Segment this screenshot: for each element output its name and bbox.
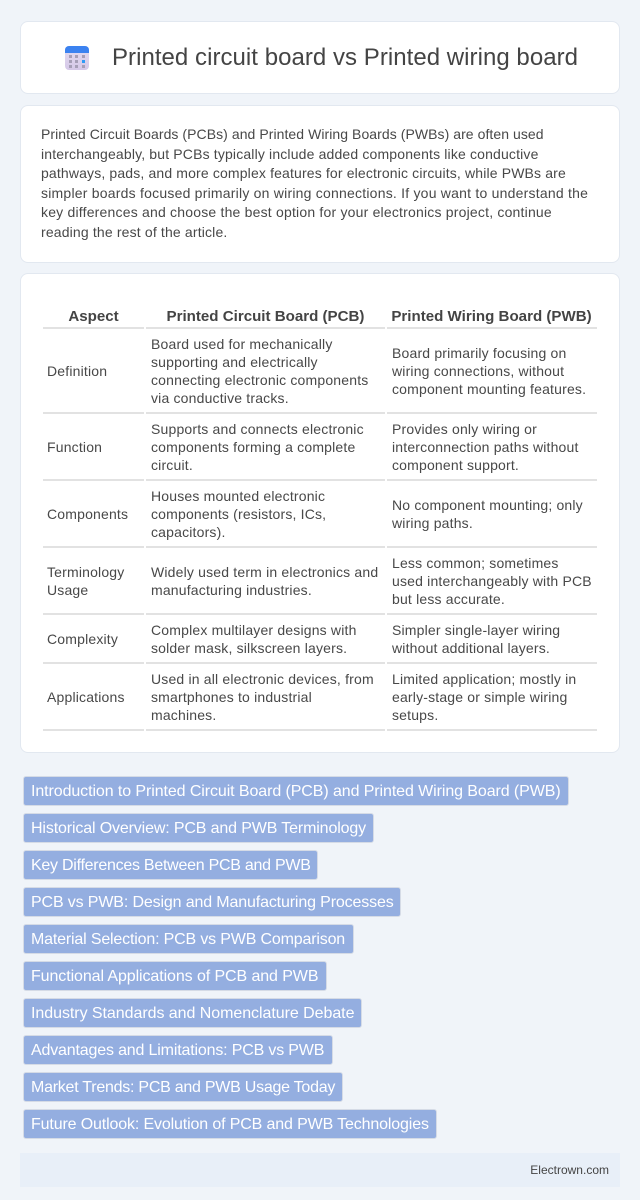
icon: circuit board chip <box>65 46 89 70</box>
table row: Definition: connecting electronic components <box>151 372 368 388</box>
tag: future outlook <box>23 1109 437 1139</box>
tag: advantages and limitations <box>23 1035 333 1065</box>
text block: introduction paragraph: simpler boards focused primarily on wiring connections. If you want to understand the <box>41 184 588 200</box>
table row: Definition: supporting and electrically <box>151 354 318 370</box>
tag: key differences <box>23 850 318 880</box>
table row: Function: Function <box>47 439 102 455</box>
table row: Complexity: solder mask, silkscreen layers. <box>151 640 347 656</box>
tag: historical overview: Historical Overview: PCB and PWB Terminology <box>31 820 366 837</box>
text block: introduction paragraph <box>41 126 588 240</box>
table row: Components <box>43 488 597 548</box>
table row: Definition <box>43 336 597 414</box>
tag: market trends <box>23 1072 343 1102</box>
panel: introduction <box>20 105 620 263</box>
table row: Terminology Usage: but less accurate. <box>392 591 505 607</box>
tag: introduction <box>23 776 569 806</box>
tag: material selection: Material Selection: PCB vs PWB Comparison <box>31 931 345 948</box>
tag: key differences: Key Differences Between PCB and PWB <box>31 857 311 874</box>
tag: industry standards <box>23 998 362 1028</box>
table row: Components: Houses mounted electronic <box>151 488 325 504</box>
table row: Applications: Applications <box>47 689 125 705</box>
footer <box>20 1153 620 1187</box>
table row: Applications: machines. <box>151 707 216 723</box>
text block: introduction paragraph: pathways, pads, and more complex features for electronic circuits, while PWBs are <box>41 165 566 181</box>
table row: Applications: Used in all electronic devices, from <box>151 671 374 687</box>
table row: Function: component support. <box>392 457 519 473</box>
table row: Components: capacitors). <box>151 524 226 540</box>
tag: advantages and limitations: Advantages and Limitations: PCB vs PWB <box>31 1042 324 1059</box>
table header: Aspect <box>68 308 119 325</box>
table row: Components: components (resistors, ICs, <box>151 506 326 522</box>
table row: Terminology Usage: Widely used term in electronics and <box>151 564 378 580</box>
table row: Terminology Usage: manufacturing industries. <box>151 582 312 598</box>
table row: Applications <box>43 671 597 731</box>
table row: Function: circuit. <box>151 457 193 473</box>
tag: functional applications <box>23 961 327 991</box>
table row: Complexity <box>43 622 597 664</box>
tag: design and manufacturing: PCB vs PWB: Design and Manufacturing Processes <box>31 894 394 911</box>
table row: Terminology Usage: Usage <box>47 582 88 598</box>
panel: header <box>20 21 620 94</box>
table row: Terminology Usage: Terminology <box>47 564 124 580</box>
table row: Definition: Board used for mechanically <box>151 336 333 352</box>
table row: Terminology Usage: Less common; sometimes <box>392 555 559 571</box>
table row: Components: wiring paths. <box>392 515 473 531</box>
table row: Definition: wiring connections, without <box>392 363 564 379</box>
table header <box>43 308 597 329</box>
table row: Function: components forming a complete <box>151 439 355 455</box>
table row: Function: interconnection paths without <box>392 439 579 455</box>
text block: introduction paragraph: Printed Circuit Boards (PCBs) and Printed Wiring Boards (PWBs) are often used <box>41 126 544 142</box>
table row: Complexity: without additional layers. <box>392 640 550 656</box>
table row: Components: Components <box>47 506 128 522</box>
footer credit: Electrown.com <box>530 1163 609 1177</box>
tag: industry standards: Industry Standards and Nomenclature Debate <box>31 1005 354 1022</box>
table row: Function: Supports and connects electronic <box>151 421 364 437</box>
table row: Definition: Board primarily focusing on <box>392 345 566 361</box>
table row: Definition: via conductive tracks. <box>151 390 289 406</box>
panel: comparison table <box>20 273 620 753</box>
text block: introduction paragraph: key differences and choose the best option for your electronics project, continue <box>41 204 552 220</box>
table row: Definition: Definition <box>47 363 107 379</box>
table header: Printed Wiring Board (PWB) <box>391 308 592 325</box>
table row: Applications: early-stage or simple wiring <box>392 689 567 705</box>
tag: future outlook: Future Outlook: Evolution of PCB and PWB Technologies <box>31 1116 429 1133</box>
table row: Applications: smartphones to industrial <box>151 689 312 705</box>
table row: Terminology Usage <box>43 555 597 615</box>
table header: Printed Circuit Board (PCB) <box>167 308 364 325</box>
table row: Terminology Usage: used interchangeably with PCB <box>392 573 592 589</box>
list of article section tags <box>23 776 569 1139</box>
table row: Function <box>43 421 597 481</box>
text block: introduction paragraph: interchangeably, but PCBs typically include added components like conductive <box>41 146 539 162</box>
table row: Components: No component mounting; only <box>392 497 583 513</box>
tag: introduction: Introduction to Printed Circuit Board (PCB) and Printed Wiring Board (PWB) <box>31 783 561 800</box>
table row: Function: Provides only wiring or <box>392 421 537 437</box>
table row: Definition: component mounting features. <box>392 381 586 397</box>
tag: material selection <box>23 924 354 954</box>
tag: design and manufacturing <box>23 887 401 917</box>
title: Printed circuit board vs Printed wiring board <box>112 44 578 71</box>
tag: market trends: Market Trends: PCB and PWB Usage Today <box>31 1079 335 1096</box>
tag: functional applications: Functional Applications of PCB and PWB <box>31 968 318 985</box>
table row: Complexity: Simpler single-layer wiring <box>392 622 560 638</box>
table row: Complexity: Complex multilayer designs with <box>151 622 357 638</box>
text block: introduction paragraph: reading the rest of the article. <box>41 224 227 240</box>
tag: historical overview <box>23 813 374 843</box>
table row: Applications: setups. <box>392 707 438 723</box>
table row: Applications: Limited application; mostly in <box>392 671 576 687</box>
table row: Complexity: Complexity <box>47 631 118 647</box>
